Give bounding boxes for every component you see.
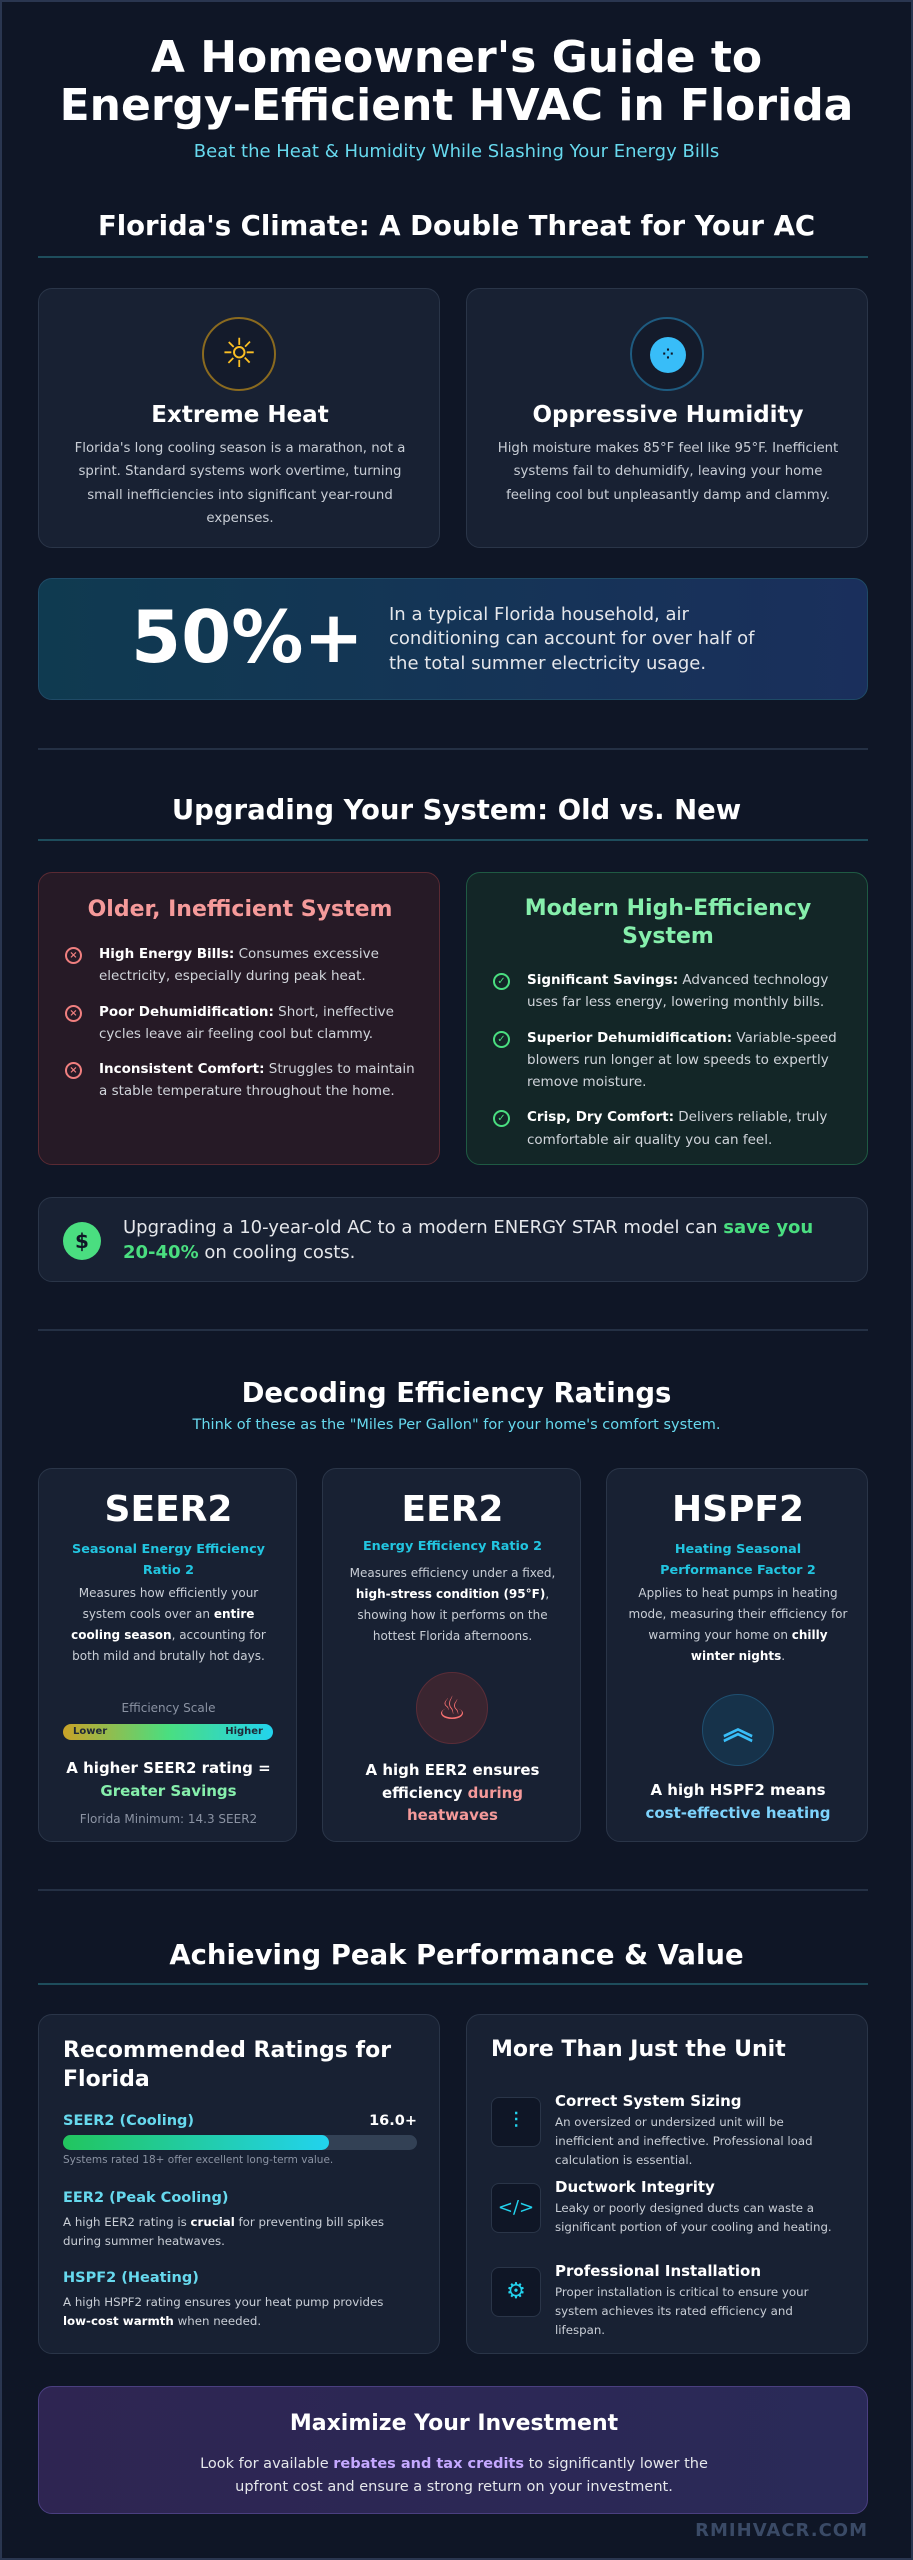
- icon: piggy: [63, 1222, 101, 1260]
- icon: humidity: ⁘: [662, 347, 674, 363]
- item: ductwork: [491, 2178, 832, 2234]
- panel: HSPF2: cost-effective heating: [645, 1804, 831, 1822]
- panel: SEER2: Lower: [73, 1726, 107, 1737]
- stat text: In a typical Florida household, air conditioning can account for over half of the total summer electricity usage.: [389, 604, 754, 674]
- panel: EER2: heatwaves: [407, 1806, 498, 1824]
- panel: maximize investment: [38, 2386, 868, 2514]
- panel: SEER2: [38, 1468, 297, 1842]
- callout: energy star: [38, 1197, 868, 1282]
- panel: EER2: Energy Efficiency Ratio 2: [363, 1539, 542, 1554]
- panel: old system: [38, 872, 440, 1165]
- stat callout: 50%: [38, 578, 868, 700]
- rating: SEER2: [63, 2113, 417, 2166]
- list: new: Significant Savings: Advanced technology uses far less energy, lowering monthly bills.: [527, 972, 828, 1010]
- callout text: Upgrading a 10-year-old AC to a modern ENERGY STAR model can save you 20-40% on cooling costs.: [123, 1217, 813, 1263]
- rating: SEER2: 16.0+: [369, 2113, 417, 2129]
- heading: extreme heat: Extreme Heat: [151, 402, 329, 428]
- panel: humidity: [466, 288, 868, 548]
- panel: SEER2: Florida Minimum: 14.3 SEER2: [80, 1812, 257, 1826]
- item: sizing: Correct System Sizing: [555, 2092, 742, 2110]
- panel: EER2: A high EER2 ensures: [366, 1761, 539, 1779]
- icon: humidity: [630, 317, 704, 391]
- panel: new system: [466, 872, 868, 1165]
- rating: SEER2: Systems rated 18+ offer excellent long-term value.: [63, 2154, 333, 2166]
- panel: HSPF2: HSPF2: [672, 1489, 804, 1530]
- title: Energy-Efficient HVAC in Florida: [60, 80, 853, 131]
- panel: recommended ratings: Recommended Ratings for Florida: [63, 2038, 391, 2092]
- list: old: [65, 946, 415, 1099]
- rating: EER2: [63, 2190, 384, 2248]
- subtitle: Beat the Heat & Humidity While Slashing Your Energy Bills: [194, 141, 719, 162]
- item: installation: Proper installation is critical to ensure your system achieves its rated efficiency and lifespan.: [555, 2285, 808, 2337]
- list: old: ×: [69, 1065, 78, 1076]
- panel: EER2: Measures efficiency under a fixed, high-stress condition (95°F), showing how it performs on the hottest Florida afternoons.: [350, 1566, 555, 1643]
- item: ductwork: Ductwork Integrity: [555, 2178, 715, 2196]
- icon: flame: [416, 1672, 488, 1744]
- panel: HSPF2: A high HSPF2 means: [650, 1781, 826, 1799]
- list: old: Poor Dehumidification: Short, ineffective cycles leave air feeling cool but clammy.: [99, 1004, 394, 1042]
- stat number: 50%+: [131, 595, 364, 679]
- panel: maximize investment: Maximize Your Investment: [290, 2411, 618, 2436]
- panel: EER2: [322, 1468, 581, 1842]
- heading: new: Modern High-Efficiency: [525, 896, 811, 921]
- rating: SEER2: SEER2 (Cooling): [63, 2113, 194, 2129]
- rating: EER2: A high EER2 rating is crucial for preventing bill spikes during summer heatwaves.: [63, 2215, 384, 2248]
- list: old: ×: [69, 1008, 78, 1019]
- panel: HSPF2: Heating Seasonal Performance Factor 2: [660, 1542, 816, 1578]
- item: installation: [491, 2262, 808, 2337]
- item: installation: ⚙: [506, 2279, 526, 2304]
- item: ductwork: </>: [498, 2197, 534, 2218]
- panel: extreme heat: [38, 288, 440, 548]
- title: A Homeowner's Guide to: [151, 32, 762, 83]
- heading: old: Older, Inefficient System: [88, 897, 392, 922]
- list: old: Inconsistent Comfort: Struggles to maintain a stable temperature throughout the home.: [99, 1061, 415, 1099]
- watermark: RMIHVACR.COM: [695, 2520, 868, 2541]
- heading: peak performance: Achieving Peak Performance & Value: [169, 1939, 744, 1971]
- icon: piggy: $: [75, 1229, 89, 1253]
- item: sizing: An oversized or undersized unit will be inefficient and ineffective. Professional load calculation is essential.: [555, 2115, 813, 2167]
- panel: HSPF2: Applies to heat pumps in heating mode, measuring their efficiency for warming your home on chilly winter nights.: [629, 1586, 847, 1663]
- rating: HSPF2: HSPF2 (Heating): [63, 2270, 199, 2286]
- panel: more than unit: More Than Just the Unit: [491, 2037, 786, 2062]
- list: new: ✓: [497, 1034, 506, 1045]
- panel: SEER2: Measures how efficiently your system cools over an entire cooling season, accounting for both mild and brutally hot days.: [71, 1586, 266, 1663]
- item: ductwork: Leaky or poorly designed ducts can waste a significant portion of your cooling and heating.: [555, 2201, 832, 2234]
- panel: SEER2: A higher SEER2 rating =: [66, 1759, 271, 1777]
- heading: new: System: [622, 924, 714, 948]
- panel: HSPF2: [606, 1468, 868, 1842]
- heading: humidity: Oppressive Humidity: [532, 402, 804, 428]
- panel: SEER2: Greater Savings: [100, 1782, 237, 1800]
- panel: recommended ratings: [38, 2014, 440, 2354]
- heading: ratings: Decoding Efficiency Ratings: [242, 1377, 671, 1409]
- efficiency scale: Efficiency Scale: [122, 1701, 215, 1715]
- item: sizing: ⫶: [513, 2109, 519, 2134]
- title: [60, 32, 853, 131]
- text: heat: Florida's long cooling season is a marathon, not a sprint. Standard systems work overtime, turning small inefficiencies into significant year-round expenses.: [75, 441, 405, 526]
- panel: SEER2: SEER2: [105, 1489, 232, 1530]
- panel: more than unit: [466, 2014, 868, 2354]
- item: sizing: [491, 2092, 813, 2167]
- text: humidity: High moisture makes 85°F feel like 95°F. Inefficient systems fail to dehumidify, leaving your home feeling cool but unpleasantly damp and clammy.: [498, 441, 838, 503]
- rating: EER2: EER2 (Peak Cooling): [63, 2190, 229, 2206]
- panel: SEER2: Seasonal Energy Efficiency Ratio 2: [72, 1542, 265, 1578]
- list: new: [493, 972, 837, 1148]
- icon: sun: [202, 317, 276, 391]
- list: new: ✓: [497, 1113, 506, 1124]
- panel: maximize investment: Look for available rebates and tax credits to significantly lower the upfront cost and ensure a strong return on your investment.: [200, 2456, 708, 2495]
- item: installation: Professional Installation: [555, 2262, 761, 2280]
- list: new: ✓: [497, 976, 506, 987]
- rating: HSPF2: [63, 2270, 383, 2328]
- list: old: ×: [69, 950, 78, 961]
- icon: flame: ♨: [438, 1689, 466, 1727]
- list: old: High Energy Bills: Consumes excessive electricity, especially during peak heat.: [99, 946, 379, 984]
- icon: chevrons up: [702, 1694, 774, 1766]
- rating: HSPF2: A high HSPF2 rating ensures your heat pump provides low-cost warmth when needed.: [63, 2295, 383, 2328]
- icon: sun: ☼: [221, 331, 257, 377]
- icon: chevrons up: ︽: [723, 1712, 753, 1747]
- subheading: ratings: Think of these as the "Miles Per Gallon" for your home's comfort system.: [192, 1417, 720, 1433]
- heading: upgrading: Upgrading Your System: Old vs. New: [172, 794, 741, 826]
- panel: EER2: EER2: [402, 1489, 503, 1530]
- panel: SEER2: Higher: [225, 1726, 263, 1737]
- list: new: Superior Dehumidification: Variable-speed blowers run longer at low speeds to expertly remove moisture.: [527, 1030, 837, 1090]
- heading: climate: Florida's Climate: A Double Threat for Your AC: [98, 210, 815, 242]
- list: new: Crisp, Dry Comfort: Delivers reliable, truly comfortable air quality you can feel.: [527, 1109, 827, 1148]
- panel: EER2: efficiency during: [382, 1784, 523, 1802]
- heading: new: [525, 896, 811, 948]
